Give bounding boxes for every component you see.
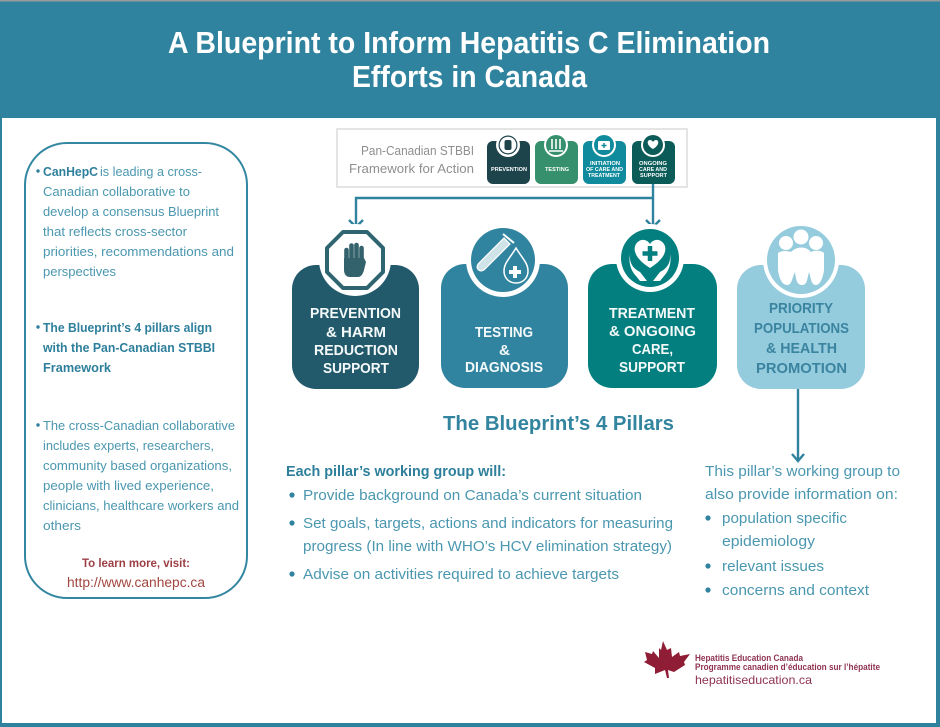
text block: collaborative members: includes experts, researchers, — [43, 438, 214, 453]
text block: working group tasks: progress (In line with WHO’s HCV elimination strategy) — [303, 538, 672, 555]
text block: CanHepC leads collaborative: that reflects cross-sector — [43, 224, 188, 239]
pillar: treatment: CARE, — [632, 341, 673, 358]
icon: group of people — [778, 230, 824, 285]
pillar: prevention — [292, 224, 419, 389]
text block: priority pillar extras — [705, 463, 900, 599]
pillar: treatment: & ONGOING — [609, 323, 696, 340]
text block: CanHepC leads collaborative — [36, 164, 234, 279]
icon: heart in hands — [629, 240, 671, 281]
mini card: initiation of care and treatment: OF CARE AND — [586, 167, 623, 173]
panel: Pan-Canadian framework: Pan-Canadian STBBI — [361, 143, 474, 158]
text block: working group tasks: Each pillar’s working group will: — [286, 463, 506, 480]
text block: collaborative members: The cross-Canadian collaborative — [43, 418, 235, 433]
text block: collaborative members: others — [43, 518, 82, 533]
pillar: testing: & — [499, 342, 510, 359]
mini card: initiation of care and treatment: INITIATION — [590, 161, 620, 167]
text block: collaborative members: clinicians, healthcare workers and — [43, 498, 239, 513]
panel: Pan-Canadian framework — [337, 129, 687, 187]
text block: collaborative members — [36, 418, 239, 533]
text block: collaborative members: people with lived experience, — [43, 478, 214, 493]
logo: Hepatitis Education Canada — [644, 641, 880, 687]
text block: learn more link — [67, 558, 205, 590]
text block: priority pillar extras: concerns and context — [722, 582, 870, 599]
text block: CanHepC leads collaborative: develop a consensus Blueprint — [43, 204, 219, 219]
text block: priority pillar extras: This pillar’s working group to — [705, 463, 900, 480]
heading: the blueprint's 4 pillars: The Blueprint’s 4 Pillars — [443, 413, 674, 435]
icon: test tube and drop — [477, 234, 528, 283]
logo: Hepatitis Education Canada: Hepatitis Education Canada — [695, 653, 803, 663]
pillar: prevention: SUPPORT — [323, 360, 389, 377]
panel: Pan-Canadian framework: Framework for Action — [349, 161, 474, 176]
mini card: initiation of care and treatment — [583, 133, 626, 184]
pillar: testing: DIAGNOSIS — [465, 359, 543, 376]
text block: working group tasks: Set goals, targets, actions and indicators for measuring — [303, 515, 673, 532]
pillar: priority populations: POPULATIONS — [754, 320, 849, 337]
pillar: priority populations — [737, 222, 865, 389]
mini card: ongoing care and support — [632, 133, 675, 184]
logo: Hepatitis Education Canada: Programme canadien d’éducation sur l’hépatite — [695, 662, 880, 672]
text block: CanHepC leads collaborative: Canadian collaborative to — [43, 184, 190, 199]
mini card: ongoing care and support: CARE AND — [639, 167, 667, 173]
text block: working group tasks: Advise on activities required to achieve targets — [303, 566, 619, 583]
mini card: ongoing care and support: SUPPORT — [640, 173, 667, 179]
text block: pillars align: The Blueprint’s 4 pillars align — [43, 320, 212, 335]
pillar: testing — [441, 223, 568, 388]
text block: working group tasks — [286, 463, 673, 583]
pillar: prevention: & HARM — [326, 324, 386, 341]
icon: maple leaf — [644, 641, 690, 678]
mini card: prevention — [487, 133, 530, 184]
text block: learn more link: To learn more, visit: — [82, 558, 190, 570]
text block: pillars align: with the Pan-Canadian STBBI — [42, 340, 215, 355]
text block: working group tasks: Provide background on Canada’s current situation — [303, 487, 642, 504]
text block: priority pillar extras: epidemiology — [722, 533, 816, 550]
text block: collaborative members: community based organizations, — [43, 458, 232, 473]
mini card: ongoing care and support: ONGOING — [639, 161, 667, 167]
text block: priority pillar extras: population specific — [722, 510, 847, 527]
text block: pillars align: Framework — [43, 360, 112, 375]
pillar: priority populations: PROMOTION — [756, 360, 847, 377]
panel: left summary — [25, 143, 247, 598]
pillar: testing: TESTING — [475, 324, 533, 341]
mini card: initiation of care and treatment: TREATMENT — [588, 173, 620, 179]
pillar: prevention: REDUCTION — [314, 342, 398, 359]
header band with title: A Blueprint to Inform Hepatitis C Elimination — [168, 25, 770, 60]
logo: Hepatitis Education Canada: hepatitiseducation.ca — [695, 673, 812, 687]
text block: CanHepC leads collaborative: CanHepC — [43, 164, 99, 179]
pillar: priority populations: & HEALTH — [766, 340, 837, 357]
pillar: treatment: TREATMENT — [609, 305, 695, 322]
header band with title — [0, 0, 940, 118]
mini card: testing: TESTING — [545, 167, 569, 173]
mini card: prevention: PREVENTION — [491, 167, 527, 173]
pillar: prevention: PREVENTION — [310, 305, 401, 322]
text block: pillars align — [36, 320, 215, 375]
text block: CanHepC leads collaborative: is leading a cross- — [100, 164, 202, 179]
text block: priority pillar extras: also provide information on: — [705, 486, 898, 503]
text block: CanHepC leads collaborative: perspectives — [43, 264, 116, 279]
pillar: treatment — [588, 224, 717, 388]
text block: learn more link: http://www.canhepc.ca — [67, 575, 205, 590]
pillar: treatment: SUPPORT — [619, 359, 685, 376]
header band with title: Efforts in Canada — [352, 59, 588, 94]
text block: CanHepC leads collaborative: priorities, recommendations and — [43, 244, 234, 259]
pillar: priority populations: PRIORITY — [769, 300, 833, 317]
icon: stop hand — [327, 232, 383, 288]
arrow: priority pillar to notes — [792, 389, 804, 461]
arrow: framework to pillars — [349, 184, 660, 227]
mini card: testing — [535, 133, 578, 184]
text block: priority pillar extras: relevant issues — [722, 558, 824, 575]
